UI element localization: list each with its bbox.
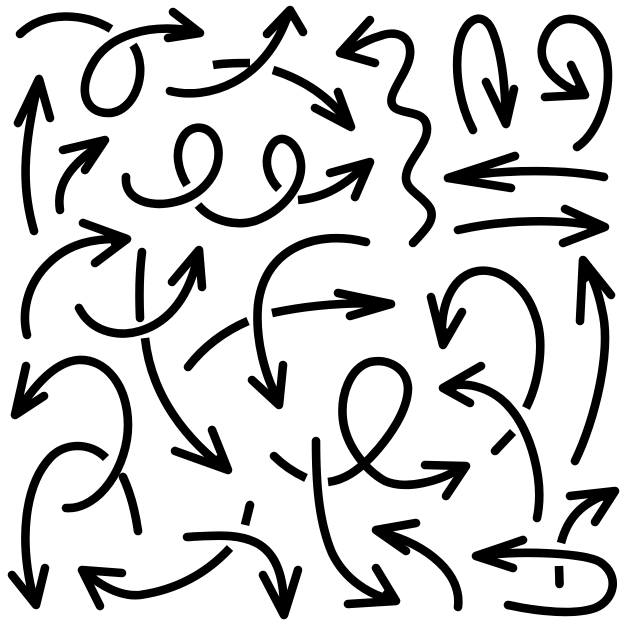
arrow: large arc pointing down (252, 238, 366, 405)
arrow: squiggle pointing left (340, 20, 432, 243)
arrow: small up-right at bottom right (561, 491, 615, 543)
arrow: small up-right (59, 140, 105, 210)
arrow: tall curve pointing right at bottom (316, 441, 396, 604)
arrow: curve pointing left at right side (443, 366, 539, 518)
arrow: curve pointing down at bottom centre (187, 536, 298, 615)
arrow: large arch pointing down (431, 271, 540, 451)
arrow: tall curve pointing up at right edge (575, 260, 611, 461)
arrow: double loop pointing right (126, 128, 370, 223)
arrow: top-left arc and loop pointing right (20, 12, 200, 113)
arrow: broken loop pointing right (274, 361, 466, 496)
arrow: arc pointing right at mid left (25, 223, 127, 335)
arrow: hook pointing down (457, 19, 514, 130)
arrow: short curve pointing down-right (273, 70, 351, 127)
arrow: long left (448, 156, 604, 188)
arrow: broken arc pointing down at bottom left (12, 446, 138, 605)
arrow: broken vertical pointing down-right (139, 252, 228, 470)
arrow: curve pointing left at bottom centre (82, 505, 250, 606)
arrow: large hook pointing down-left (15, 360, 128, 508)
arrow: tall up at left (18, 79, 50, 231)
arrow: spiral hook at top right (542, 19, 608, 147)
arrow: broken line pointing right (188, 293, 391, 367)
arrow: curve pointing up-left at bottom (376, 523, 458, 607)
arrow: top curve pointing up-right (170, 10, 303, 93)
arrow: U curve pointing up (79, 250, 202, 333)
arrow: bottom loop pointing left (476, 540, 613, 612)
arrow: long right (458, 209, 605, 243)
